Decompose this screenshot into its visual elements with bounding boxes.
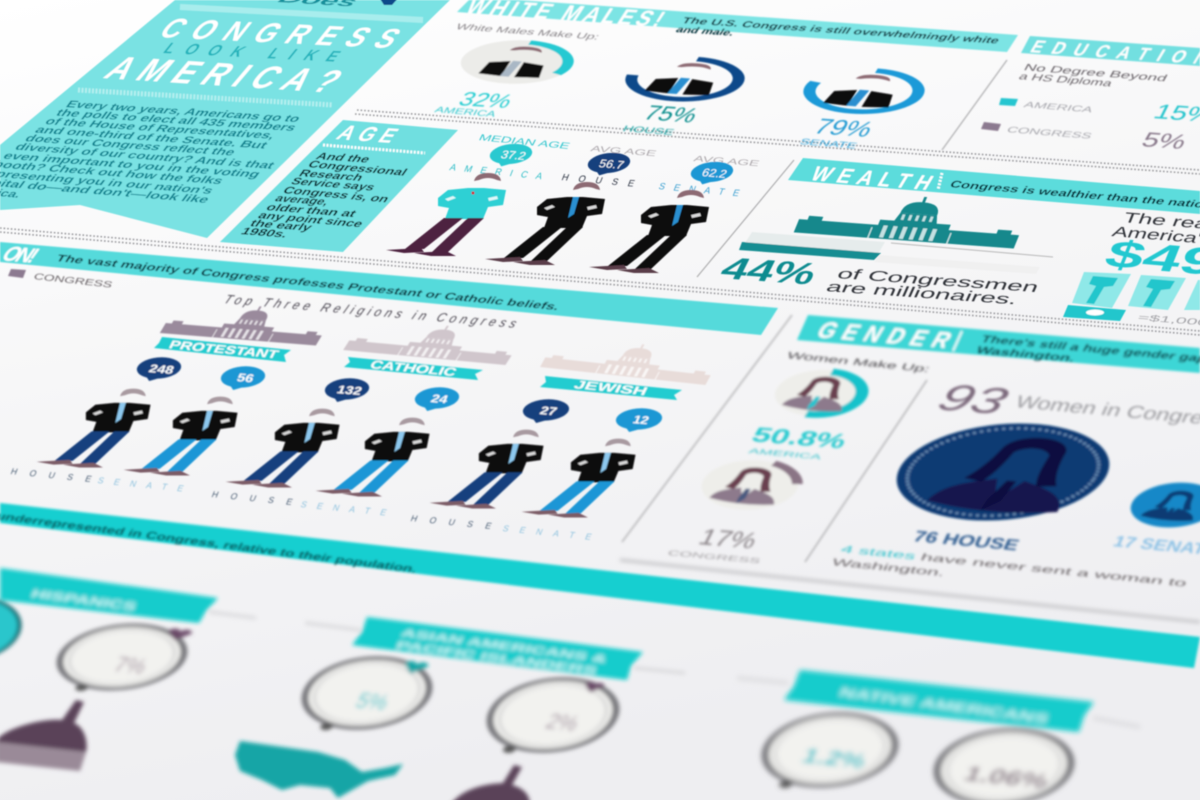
dots [1094,718,1140,727]
icon: capitol [794,189,1032,248]
dots [738,678,788,683]
ring: america 50.8% [764,366,876,420]
ribbon: asian americans: PACIFIC ISLANDERS [394,640,599,677]
label: house: HOUSE [560,172,636,188]
dotted rule [323,145,425,153]
label: senate: SENATE [798,137,860,150]
stat: america: 32% [454,88,517,113]
ribbon: asian americans: ASIAN AMERICANS & [399,628,610,666]
banner text: and male. [674,25,737,38]
stat: 44%: 44% [715,251,824,291]
age paragraph: Service says [288,176,378,193]
age paragraph: older than at [263,202,359,220]
separator [953,331,962,351]
icon: capitol jewish [540,335,723,385]
ribbon: asian americans [352,617,643,680]
heading: wealth: WEALTH [806,162,938,195]
heading: age: AGE [332,120,404,147]
title text large: AMERICA? [96,50,352,99]
stat 15%: 15% [1150,101,1200,127]
bubble 56.7 [580,151,636,177]
map: united states [235,741,403,798]
labels: house and senate: HOUSE [409,513,493,531]
intro paragraph: Every two years, Americans go to [63,99,304,125]
bubbles: member counts: 27 [538,405,558,418]
ribbon: catholic: CATHOLIC [368,359,459,379]
stat: senate: 79% [809,114,879,141]
labels: house and senate: SENATE [501,523,593,542]
intro paragraph: does our Congress reflect the [22,133,238,158]
ribbon: protestant: PROTESTANT [167,339,282,361]
legend swatch america [999,98,1018,106]
intro paragraph: the polls to elect all 435 members [53,108,299,134]
bag legend: =$1,000 [1136,312,1200,328]
age paragraph [238,151,410,240]
label: avg age: AVG AGE [692,153,762,168]
label: congress: CONGRESS [666,548,762,565]
stat: house: 75% [639,101,703,127]
intro paragraph: and one-third of the Senate. But [32,125,271,151]
panel: gender [622,315,1200,589]
intro paragraph [0,99,304,206]
panel: age text [220,120,458,252]
bubbles: member counts [129,356,668,434]
ribbon: hispanics [0,568,218,623]
subheading: No Degree Beyond [1021,63,1169,84]
label: 76 house: 76 HOUSE [910,529,1022,554]
subheading: Women Make Up: [785,350,932,375]
bubble 37.2: 37.2 [499,149,527,163]
icon: capitol protestant [160,300,336,345]
panel: wealth [697,158,1200,328]
bubble 62.2 [683,160,739,186]
panel: religion [0,242,778,542]
banner text: underrepresented in Congress, relative to their population. [0,511,419,576]
ring: 1.2% [744,708,913,797]
ribbon: hispanics: HISPANICS [29,588,139,613]
stat: 1.06%: 1.06% [960,762,1053,793]
icon: capitol dome [0,700,87,771]
banner text: Congress is wealthier than the nation [947,180,1200,211]
caption line one: of Congressmen [834,267,1041,296]
age paragraph: Research [296,168,366,184]
stat: 1.2%: 1.2% [798,744,871,773]
label: avg age: AVG AGE [589,143,659,158]
ribbon: catholic [344,357,483,380]
ring: america partial [0,593,32,665]
panel: white males [433,0,1018,150]
figures: religion members [36,389,635,518]
circle: senate women [1119,479,1200,531]
intro paragraph: of the House of Representatives, [42,116,278,141]
ring: house 75% [620,55,750,103]
labels: house and senate: SENATE [96,475,185,493]
stat: 50.8%: 50.8% [748,423,851,453]
age paragraph: And the [313,151,373,165]
top strip [180,7,423,20]
legend swatch congress [981,122,1001,131]
age paragraph: average, [272,193,332,208]
icon: capitol catholic [343,318,526,365]
income text line two: America's [1109,224,1200,248]
labels: house and senate: SENATE [299,499,388,517]
dotted dividers [0,110,1200,335]
intro paragraph: diversity of our country? And is that [12,142,278,171]
legend label congress: CONGRESS [1005,125,1095,141]
note line two: Washington. [830,557,946,579]
ring: 2% [469,673,634,762]
labels: house and senate: HOUSE [9,466,93,484]
intro paragraph: even important to you in the voting [0,151,263,180]
age paragraph: Congress is, on [280,185,392,205]
chart title: Top Three Religions in Congress [222,292,520,331]
heading: gender: GENDER [812,318,957,354]
labels: house and senate: HOUSE [210,489,294,507]
stat 5%: 5% [1138,129,1191,154]
ring: america 32% [449,36,585,88]
legend label: CONGRESS [32,271,114,290]
dotted separator [938,173,942,190]
stat: 2%: 2% [542,709,584,736]
section: asian americans [235,617,685,800]
ring: 5% [284,651,447,739]
rule above race section [620,560,1200,622]
label: median age: MEDIAN AGE [477,132,572,151]
subheading line two: a HS Diploma [1016,72,1115,89]
ring: 1.06% [919,723,1089,800]
stat: 17%: 17% [695,524,762,553]
stat: 93: 93 [931,377,1015,423]
ribbon: jewish [540,376,682,400]
ribbon: jewish: JEWISH [572,379,650,398]
ring: congress 17% [679,450,821,520]
bubbles: member counts: 248 [147,363,176,377]
label: america: AMERICA [747,446,823,461]
subheading: White Males Make Up: [454,22,602,41]
bubble 62.2: 62.2 [700,167,728,181]
dots [635,668,685,673]
ring: senate 79% [798,67,930,115]
banner text: The vast majority of Congress professes Protestant or Catholic beliefs. [53,254,562,313]
income text line one: The real [1120,210,1200,233]
title text: CONGRESS [152,13,408,54]
bubbles: member counts: 56 [235,372,255,385]
age paragraph: 1980s. [238,226,291,240]
age paragraph: Congressional [305,159,410,178]
label: house: HOUSE [621,124,677,137]
section: native americans [738,670,1140,800]
legend swatch [8,269,26,278]
age paragraph: the early [247,218,315,233]
bubbles: member counts: 12 [631,414,650,427]
dotted rule [78,90,333,105]
age paragraph: any point since [255,210,366,230]
label: america: AMERICA [448,162,545,181]
ring: 7% [39,619,202,699]
dots [306,623,360,630]
banner text: There's still a huge gender gap [978,334,1200,365]
label: 17 senate: 17 SENATE [1110,534,1200,559]
label: senate: SENATE [657,181,741,198]
figure: america [386,173,506,256]
panel: race banner [0,503,1200,668]
bubbles: member counts: 132 [335,384,363,398]
banner text [674,16,1002,45]
legend label america: AMERICA [1022,100,1096,114]
title text middle: LOOK LIKE [159,39,345,65]
stat: income: $49, [1099,233,1200,285]
labels: house and senate [9,466,593,542]
dots [210,612,256,618]
banner text line two: Washington. [973,345,1078,365]
stat: 7%: 7% [110,652,152,679]
caption: women in congress: Women in Congress [1012,392,1200,430]
note line one: 4 states have never sent a woman to [839,544,1189,589]
icon: star [377,0,400,5]
icon: capitol dome [450,765,530,800]
panel: education [942,36,1200,154]
bubble 37.2 [482,142,538,168]
ribbon: native americans [784,670,1094,732]
chart: age figures [386,132,762,273]
stat: 5%: 5% [352,688,394,715]
label: america: AMERICA [433,105,499,119]
caption line two: are millionaires. [823,280,1020,308]
ribbon: native americans: NATIVE AMERICANS [837,685,1052,726]
banner text: The U.S. Congress is still overwhelmingly white [680,16,1002,45]
figure: house [485,182,605,265]
section: hispanics [0,568,256,771]
circle: house women [867,415,1139,529]
ribbon: protestant [154,337,291,362]
bubble 56.7: 56.7 [597,158,625,172]
progress bar [739,232,1053,274]
figure: senate [589,190,709,273]
icon: money bags [1063,272,1200,321]
bubbles: member counts: 24 [429,393,450,406]
panel: title banner [0,0,450,238]
